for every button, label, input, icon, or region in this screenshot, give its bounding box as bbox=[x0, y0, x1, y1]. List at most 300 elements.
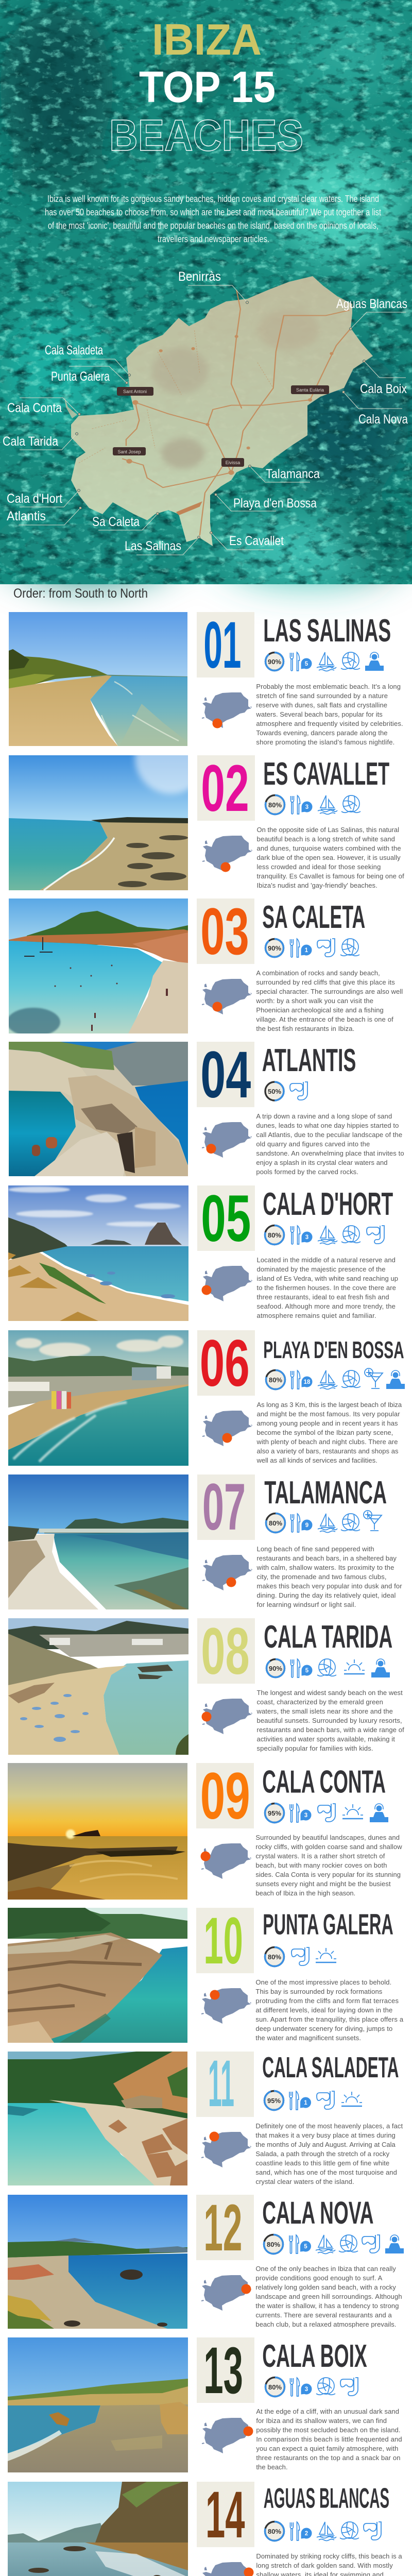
icon: occupancy 95% bbox=[265, 1803, 284, 1823]
description: enjoy a splash in its crystal clear waters and bbox=[256, 1159, 387, 1166]
panel: beach 06 Playa d'en Bossa bbox=[8, 1327, 405, 1466]
icon: ball bbox=[317, 1659, 336, 1676]
icon: occupancy 80%: 80% bbox=[269, 1519, 282, 1527]
icons row bbox=[266, 1511, 382, 1532]
number 07 bbox=[197, 1470, 255, 1544]
photo: Talamanca bbox=[8, 1475, 188, 1609]
photo: Sa Caleta bbox=[9, 899, 188, 1033]
icon: cocktail bbox=[364, 1511, 382, 1531]
icon: restaurants 3: 3 bbox=[305, 804, 308, 810]
description: also a variety of bars, restaurants and shops as bbox=[256, 1447, 399, 1455]
number 09 bbox=[196, 1759, 254, 1833]
photo: Es Cavallet bbox=[9, 755, 188, 890]
map town tag: Sant Josep: Sant Josep bbox=[117, 449, 141, 454]
photo: Atlantis bbox=[9, 1042, 188, 1176]
description: rocky cliffs, with golden coarse sand and shallow bbox=[255, 1843, 402, 1851]
number 09: 09 bbox=[200, 1759, 250, 1833]
map labels and leader lines: Cala Tarida bbox=[3, 434, 58, 449]
description: deep underwater scenery for diving, jumps to bbox=[255, 2025, 392, 2032]
map labels and leader lines: Atlantis bbox=[7, 509, 46, 523]
description: among young people and in recent years it has bbox=[256, 1419, 398, 1427]
icons row bbox=[265, 1803, 388, 1823]
number 06: 06 bbox=[200, 1327, 250, 1400]
icon: occupancy 90% bbox=[267, 1659, 284, 1677]
icon: restaurants 18: 18 bbox=[304, 1379, 311, 1385]
description bbox=[256, 2408, 402, 2471]
icon: occupancy 80%: 80% bbox=[268, 2383, 282, 2391]
description bbox=[255, 2122, 403, 2185]
location map bbox=[202, 1266, 252, 1301]
map town tag: Eivissa bbox=[221, 458, 244, 467]
icon: occupancy 80%: 80% bbox=[268, 1231, 281, 1239]
icons row bbox=[265, 1947, 336, 1966]
icon: snorkel bbox=[340, 2378, 358, 2396]
map labels and leader lines: Cala d'Hort bbox=[7, 492, 62, 506]
icon: restaurants 1 bbox=[290, 939, 312, 957]
location map bbox=[202, 2562, 253, 2576]
icon: restaurants 9 bbox=[290, 1514, 313, 1532]
description: worth: by a short walk you can visit the bbox=[255, 997, 373, 1005]
description: Definitely one of the most heavenly places, a fact bbox=[255, 2122, 403, 2130]
icon: dj bbox=[370, 1804, 388, 1822]
map labels and leader lines: Cala Saladeta bbox=[45, 343, 103, 358]
icon: occupancy 95%: 95% bbox=[268, 1809, 281, 1817]
location map bbox=[202, 1699, 252, 1734]
icon: restaurants 1: 1 bbox=[305, 947, 308, 954]
icon: occupancy 90% bbox=[266, 939, 283, 957]
number 02: 02 bbox=[201, 752, 249, 825]
icon: restaurants 2: 2 bbox=[305, 2531, 308, 2537]
description: waters, the small islets near its shore and the bbox=[256, 1707, 393, 1715]
icon: snorkel bbox=[367, 1226, 384, 1244]
number 01 bbox=[197, 608, 254, 682]
icon: sunset bbox=[316, 1948, 336, 1962]
icon: snorkel bbox=[318, 1804, 335, 1822]
map labels and leader lines: Cala Conta bbox=[7, 401, 62, 415]
icon: dj bbox=[365, 652, 384, 671]
icon: ball bbox=[341, 795, 360, 812]
panel: beach 13 Cala Boix bbox=[8, 2334, 402, 2472]
location map bbox=[201, 2275, 251, 2311]
description: pools formed by the carved rocks. bbox=[256, 1168, 358, 1176]
icon: occupancy 80% bbox=[266, 1514, 285, 1532]
photo: Cala Nova bbox=[8, 2195, 187, 2329]
icon: restaurants 3 bbox=[290, 1226, 313, 1244]
location map bbox=[201, 1988, 251, 2024]
icon: snorkel bbox=[362, 2235, 380, 2253]
icon: ball bbox=[339, 2235, 358, 2252]
description: Ibiza's nudist and 'gay-friendly' beaches. bbox=[256, 882, 377, 889]
number 13: 13 bbox=[203, 2334, 243, 2408]
icon: sail bbox=[317, 652, 336, 671]
description bbox=[256, 1112, 404, 1176]
number 05: 05 bbox=[201, 1182, 251, 1256]
icons row bbox=[266, 652, 384, 671]
description bbox=[256, 1401, 402, 1464]
description: three restaurants on the top and a snack bar on bbox=[256, 2454, 401, 2462]
description: sunsets every night and might be the busiest bbox=[255, 1880, 391, 1888]
location map bbox=[202, 1122, 252, 1158]
icon: restaurants 3: 3 bbox=[305, 1234, 308, 1241]
icon: restaurants 1 bbox=[289, 2091, 311, 2110]
description: special character. The surroundings are also well bbox=[256, 988, 403, 995]
icon: occupancy 80%: 80% bbox=[268, 2528, 281, 2535]
icon: restaurants 5: 5 bbox=[304, 2244, 307, 2250]
description: Probably the most emblematic beach. It's a long bbox=[256, 683, 401, 690]
number 03: 03 bbox=[200, 895, 249, 969]
description: at different levels, ideal for laying down in the bbox=[255, 2006, 392, 2014]
number 13 bbox=[197, 2334, 254, 2408]
icon: snorkel bbox=[317, 939, 335, 957]
icon: ball bbox=[341, 652, 360, 669]
description: currents. There are several restaurants and a bbox=[255, 2311, 392, 2319]
icon: restaurants 5 bbox=[290, 652, 312, 671]
panel: beach 08 Cala Tarida bbox=[8, 1615, 404, 1755]
icon: snorkel bbox=[291, 1947, 309, 1965]
intro paragraph bbox=[45, 194, 381, 244]
panel: beach 04 Atlantis bbox=[9, 1038, 404, 1176]
location map bbox=[202, 1555, 252, 1590]
description: old quarry and figures carved into the bbox=[256, 1140, 370, 1148]
description: atmosphere and frequently visited by celebrities. bbox=[256, 720, 403, 727]
photo: Playa d'en Bossa bbox=[8, 1330, 188, 1466]
description: coast, characterized by the emerald green bbox=[256, 1698, 383, 1706]
icon: ball bbox=[341, 1370, 360, 1387]
map labels and leader lines: Sa Caleta bbox=[92, 515, 140, 529]
description: One of the most impressive places to behold. bbox=[255, 1978, 391, 1986]
description bbox=[256, 1689, 404, 1752]
description: sides. Cala Conta is very popular for its stunning bbox=[255, 1871, 401, 1878]
number 04: 04 bbox=[200, 1038, 251, 1112]
description: long stretch of dark golden sand. With mostly bbox=[256, 2562, 393, 2569]
icon: occupancy 80%: 80% bbox=[268, 1953, 281, 1961]
map labels and leader lines: Benirràs bbox=[178, 269, 221, 284]
description: city, the promenade and two famous clubs, bbox=[256, 1573, 386, 1581]
icons row bbox=[266, 795, 360, 814]
photo: Punta Galera bbox=[8, 1908, 187, 2043]
number 12: 12 bbox=[203, 2191, 242, 2265]
icon: occupancy 90%: 90% bbox=[268, 658, 281, 666]
panel: beach 03 Sa Caleta bbox=[7, 895, 403, 1037]
description: Phoenician archeological site and a fishing bbox=[256, 1006, 384, 1014]
description: surrounded by red cliffs that give this place its bbox=[256, 978, 395, 986]
icon: dj bbox=[371, 1659, 390, 1677]
map labels and leader lines: Es Cavallet bbox=[229, 534, 284, 548]
map: Ibiza island bbox=[64, 276, 373, 546]
icon: occupancy 80% bbox=[266, 795, 284, 814]
number 11 bbox=[196, 2047, 254, 2121]
description: beautiful sunsets. Surrounded by luxury resorts, bbox=[256, 1717, 402, 1724]
description: seafood. Although more and more trendy, the bbox=[256, 1302, 396, 1310]
map labels and leader lines: Playa d'en Bossa bbox=[233, 496, 317, 511]
description: restaurants and beach bars, with a wide range of bbox=[256, 1726, 404, 1734]
icon: restaurants 3 bbox=[290, 1804, 312, 1822]
description: with plenty of beach and night clubs. There are bbox=[256, 1438, 398, 1446]
icons row bbox=[266, 2377, 358, 2397]
description: A combination of rocks and sandy beach, bbox=[256, 969, 380, 977]
description: sandstone. An overwhelming place that invites to bbox=[256, 1149, 404, 1157]
description: beach of Ibiza in the high season. bbox=[255, 1889, 355, 1897]
number 12 bbox=[196, 2191, 254, 2265]
description: reserve with dunes, salt flats and crystalline bbox=[256, 701, 387, 709]
icon: occupancy 80%: 80% bbox=[269, 1376, 282, 1384]
description: to the fishermen houses. In the cove there are bbox=[256, 1284, 396, 1292]
icons row bbox=[265, 2091, 362, 2110]
panel: beach 05 Cala d'Hort bbox=[8, 1182, 398, 1321]
number 10: 10 bbox=[203, 1904, 243, 1978]
description: village. At the entrance of the beach is one of bbox=[256, 1015, 393, 1023]
number 07: 07 bbox=[202, 1470, 246, 1544]
icon: restaurants 2 bbox=[290, 2522, 312, 2540]
description bbox=[255, 2265, 402, 2328]
description: that makes it a very busy place at times during bbox=[255, 2131, 396, 2139]
number 08: 08 bbox=[201, 1615, 250, 1688]
photo: Las Salinas bbox=[9, 612, 187, 746]
location map bbox=[202, 836, 252, 872]
description: crystal clear waters of the island. bbox=[255, 2178, 354, 2185]
icon: restaurants 3 bbox=[290, 795, 313, 814]
description: restaurants and beach bars, in a sheltered bay bbox=[256, 1554, 397, 1562]
icon: occupancy 95% bbox=[265, 2091, 283, 2110]
number 05 bbox=[197, 1182, 255, 1256]
map town tag: Sant Antoni: Sant Antoni bbox=[123, 389, 147, 394]
description: In comparison this beach is little frequented and bbox=[256, 2435, 402, 2443]
photo: Cala Conta bbox=[8, 1763, 187, 1900]
icon: snorkel bbox=[290, 1082, 307, 1100]
icon: sunset bbox=[344, 1659, 365, 1674]
icon: sail bbox=[316, 2235, 335, 2253]
description: and dunes, turquoise waters combined with the bbox=[256, 844, 401, 852]
description: One of the only beaches in Ibiza that can really bbox=[255, 2265, 396, 2273]
number 10 bbox=[196, 1904, 254, 1978]
icon: restaurants 18 bbox=[290, 1370, 313, 1389]
icon: dj bbox=[386, 1370, 405, 1389]
number 11: 11 bbox=[208, 2047, 234, 2121]
icon: occupancy 80% bbox=[266, 1370, 285, 1389]
description: Long beach of fine sand peppered with bbox=[256, 1545, 374, 1553]
description: sun. Apart from the tranquility, this place offers a bbox=[255, 2015, 404, 2023]
icon: restaurants 5 bbox=[289, 2235, 311, 2253]
icon: restaurants 1: 1 bbox=[304, 2100, 307, 2106]
description: the best fish restaurants in Ibiza. bbox=[256, 1025, 354, 1032]
description bbox=[256, 1545, 402, 1608]
description: Towards evening, dancers parade along the bbox=[256, 729, 387, 737]
icon: sail bbox=[318, 1226, 337, 1245]
number 03 bbox=[197, 895, 254, 969]
location map bbox=[201, 2132, 251, 2167]
photo: Cala Tarida bbox=[8, 1618, 188, 1755]
description: Salada, a path through the stretch of a rocky bbox=[255, 2150, 390, 2158]
icon: occupancy 90% bbox=[266, 652, 283, 671]
description: relatively long golden sand beach, with a rocky bbox=[255, 2283, 396, 2291]
description: waters. Several beach bars, popular for its bbox=[255, 710, 383, 718]
panel: header water background bbox=[0, 0, 412, 584]
description: Located in the middle of a natural reserve and bbox=[256, 1256, 396, 1264]
panel: beach 10 Punta Galera bbox=[8, 1904, 404, 2043]
description: beach, but with many rockier coves on both bbox=[255, 1861, 387, 1869]
description: three restaurants, ideal to eat fresh fish and bbox=[256, 1293, 389, 1301]
title: Top 15: TOP 15 bbox=[139, 63, 276, 112]
description: shore promoting the island’s famous nightlife. bbox=[256, 738, 394, 746]
icon: ball bbox=[316, 2378, 335, 2395]
map labels and leader lines: Talamanca bbox=[266, 467, 320, 481]
panel: beach 11 Cala Saladeta bbox=[8, 2047, 403, 2185]
description: the water is shallow, it has a tendency to strong bbox=[255, 2302, 399, 2310]
map labels and leader lines: Punta Galera bbox=[51, 369, 110, 384]
description: with calm, shallow waters. Its proximity to the bbox=[256, 1564, 394, 1571]
map town tag: Sant Josep bbox=[113, 447, 146, 455]
map town tag: Santa Eularia bbox=[291, 385, 329, 394]
description bbox=[256, 1256, 398, 1319]
description: the months of July and August. Arriving at Cala bbox=[255, 2141, 396, 2148]
number 02 bbox=[197, 752, 255, 825]
description: possibly the most secluded beach on the island. bbox=[256, 2426, 401, 2434]
description: the beach. bbox=[256, 2463, 288, 2471]
icon: cocktail bbox=[365, 1368, 383, 1388]
icon: restaurants 3 bbox=[290, 2378, 312, 2396]
description: island of Es Vedra, with white sand reaching up bbox=[256, 1275, 398, 1282]
description: makes this beach very popular into dusk and for bbox=[256, 1582, 402, 1590]
description bbox=[255, 1834, 402, 1897]
description: sand, which has one of the most turquoise and bbox=[255, 2168, 397, 2176]
icon: occupancy 80% bbox=[264, 2235, 283, 2253]
number 01: 01 bbox=[203, 608, 241, 682]
description: The longest and widest sandy beach on the west bbox=[256, 1689, 403, 1697]
panel: beach 14 Aguas Blancas bbox=[8, 2478, 402, 2576]
icon: sunset bbox=[342, 1804, 363, 1819]
number 14 bbox=[197, 2478, 254, 2552]
description: the water and magnificent sunsets. bbox=[255, 2034, 361, 2042]
icon: snorkel bbox=[317, 2091, 334, 2109]
description: On the opposite side of Las Salinas, this natural bbox=[256, 826, 399, 834]
icon: occupancy 90%: 90% bbox=[269, 1665, 282, 1672]
description: and might be the most famous. Its very popular bbox=[256, 1410, 400, 1418]
panel: beach 01 Las Salinas bbox=[9, 608, 403, 746]
icon: restaurants 3: 3 bbox=[305, 2386, 308, 2393]
location map bbox=[202, 1411, 252, 1446]
location map bbox=[202, 2418, 253, 2453]
description: beautiful beach is a long stretch of white sand bbox=[256, 835, 395, 843]
icon: occupancy 80% bbox=[265, 1225, 284, 1245]
icons row bbox=[265, 1082, 307, 1100]
description bbox=[255, 683, 403, 746]
description bbox=[255, 969, 403, 1032]
description: stretch of fine sand surrounded by a nature bbox=[256, 692, 388, 700]
description bbox=[256, 826, 404, 889]
map town tag: Sant Antoni bbox=[117, 387, 153, 396]
map town tag: Eivissa: Eivissa bbox=[226, 460, 240, 465]
description: beach club, but a relaxed atmosphere prevails. bbox=[255, 2320, 396, 2328]
description: atmosphere remains quiet and familiar. bbox=[256, 1312, 376, 1319]
map labels and leader lines: Las Salinas bbox=[125, 539, 181, 553]
icon: restaurants 5: 5 bbox=[305, 1668, 309, 1674]
description: well as all kinds of services and facilities. bbox=[256, 1456, 377, 1464]
icon: sail bbox=[318, 795, 337, 814]
photo: Cala Saladeta bbox=[8, 2052, 187, 2185]
icon: ball bbox=[340, 939, 359, 956]
icons row bbox=[265, 1225, 384, 1245]
description bbox=[255, 1978, 404, 2042]
location map bbox=[201, 1843, 251, 1879]
description: protruding from the cliffs and form flat terraces bbox=[255, 1997, 399, 2005]
icon: sail bbox=[317, 2522, 336, 2541]
icon: occupancy 95%: 95% bbox=[267, 2097, 281, 2105]
icon: restaurants 3: 3 bbox=[304, 1812, 307, 1819]
title: Ibiza: IBIZA bbox=[152, 15, 262, 64]
icon: ball bbox=[341, 1514, 360, 1531]
description bbox=[256, 2552, 402, 2576]
description: you can expect a quiet family atmosphere, with bbox=[256, 2445, 398, 2452]
photo: Cala Boix bbox=[8, 2337, 188, 2472]
description: call Atlantis, due to the peculiar landscape of the bbox=[256, 1131, 402, 1139]
icon: sail bbox=[318, 1370, 337, 1389]
icon: sail bbox=[318, 1514, 337, 1532]
description: dominated by the majestic presence of the bbox=[256, 1265, 385, 1273]
map labels and leader lines bbox=[3, 269, 408, 555]
description: Dominated by striking rocky cliffs, this beach is a bbox=[256, 2552, 402, 2560]
icon: occupancy 50%: 50% bbox=[268, 1088, 281, 1095]
description: specially popular for families with kids. bbox=[256, 1744, 373, 1752]
description: A trip down a ravine and a long slope of sand bbox=[256, 1112, 392, 1120]
panel: beach 09 Cala Conta bbox=[8, 1759, 402, 1900]
description: dark blue of the open sea. However, it is usually bbox=[256, 854, 401, 861]
panel: beach 02 Es Cavallet bbox=[9, 722, 404, 890]
icon: ball bbox=[341, 1226, 360, 1243]
description: landscape and green hill sorroundings. Although bbox=[255, 2293, 402, 2300]
number 08 bbox=[197, 1615, 255, 1688]
icons row bbox=[267, 1659, 390, 1677]
description: tranquility. Es Cavallet is famous for being one of bbox=[256, 872, 404, 880]
description: dining. During the day its relatively quiet, ideal bbox=[256, 1591, 396, 1599]
icon: occupancy 80%: 80% bbox=[268, 801, 282, 809]
location map bbox=[202, 692, 252, 728]
description: for learning windsurf or light sail. bbox=[256, 1601, 356, 1608]
title: Beaches outline: BEACHES bbox=[109, 111, 303, 160]
icon: dj bbox=[385, 2235, 404, 2253]
icon: snorkel bbox=[364, 2522, 381, 2540]
icon: occupancy 80% bbox=[266, 2377, 284, 2397]
icon: sunset bbox=[341, 2092, 362, 2106]
icons row bbox=[266, 939, 359, 957]
description: become the symbol of the Ibizan party scene, bbox=[256, 1429, 393, 1436]
location map bbox=[202, 979, 252, 1014]
icons row bbox=[264, 2235, 404, 2253]
icon: restaurants 5: 5 bbox=[305, 661, 308, 667]
description: As long as 3 Km, this is the largest beach of Ibiza bbox=[256, 1401, 402, 1409]
icon: restaurants 9: 9 bbox=[305, 1522, 308, 1529]
icon: occupancy 80% bbox=[265, 2521, 284, 2541]
panel: beach 07 Talamanca bbox=[8, 1470, 402, 1609]
number 04 bbox=[197, 1038, 254, 1112]
description: coastline leads to this little gem of fine white bbox=[255, 2159, 389, 2167]
icon: occupancy 80%: 80% bbox=[267, 2241, 280, 2248]
icons row bbox=[265, 2521, 381, 2541]
intro paragraph: travellers and newspaper articles. bbox=[158, 234, 269, 244]
number 14: 14 bbox=[205, 2478, 245, 2552]
description: crystal waters. It is a rather short stretch of bbox=[255, 1852, 385, 1860]
description: This bay is surrounded by rock formations bbox=[255, 1988, 383, 1995]
description: less crowded and ideal for those seeking bbox=[256, 863, 381, 871]
description: dunes, leads to what one day hippies started to bbox=[256, 1122, 399, 1129]
map town tag: Santa Eularia: Santa Eulària bbox=[296, 387, 324, 393]
panel: beach 12 Cala Nova bbox=[8, 2191, 404, 2329]
icon: restaurants 5 bbox=[290, 1659, 313, 1677]
description: activities and water sports available, making it bbox=[256, 1735, 395, 1743]
photo: Aguas Blancas bbox=[8, 2482, 188, 2576]
description: for Ibiza and its shallow waters, we can find bbox=[256, 2417, 387, 2425]
icons row bbox=[266, 1368, 405, 1389]
order note: Order: from South to North bbox=[13, 586, 148, 601]
